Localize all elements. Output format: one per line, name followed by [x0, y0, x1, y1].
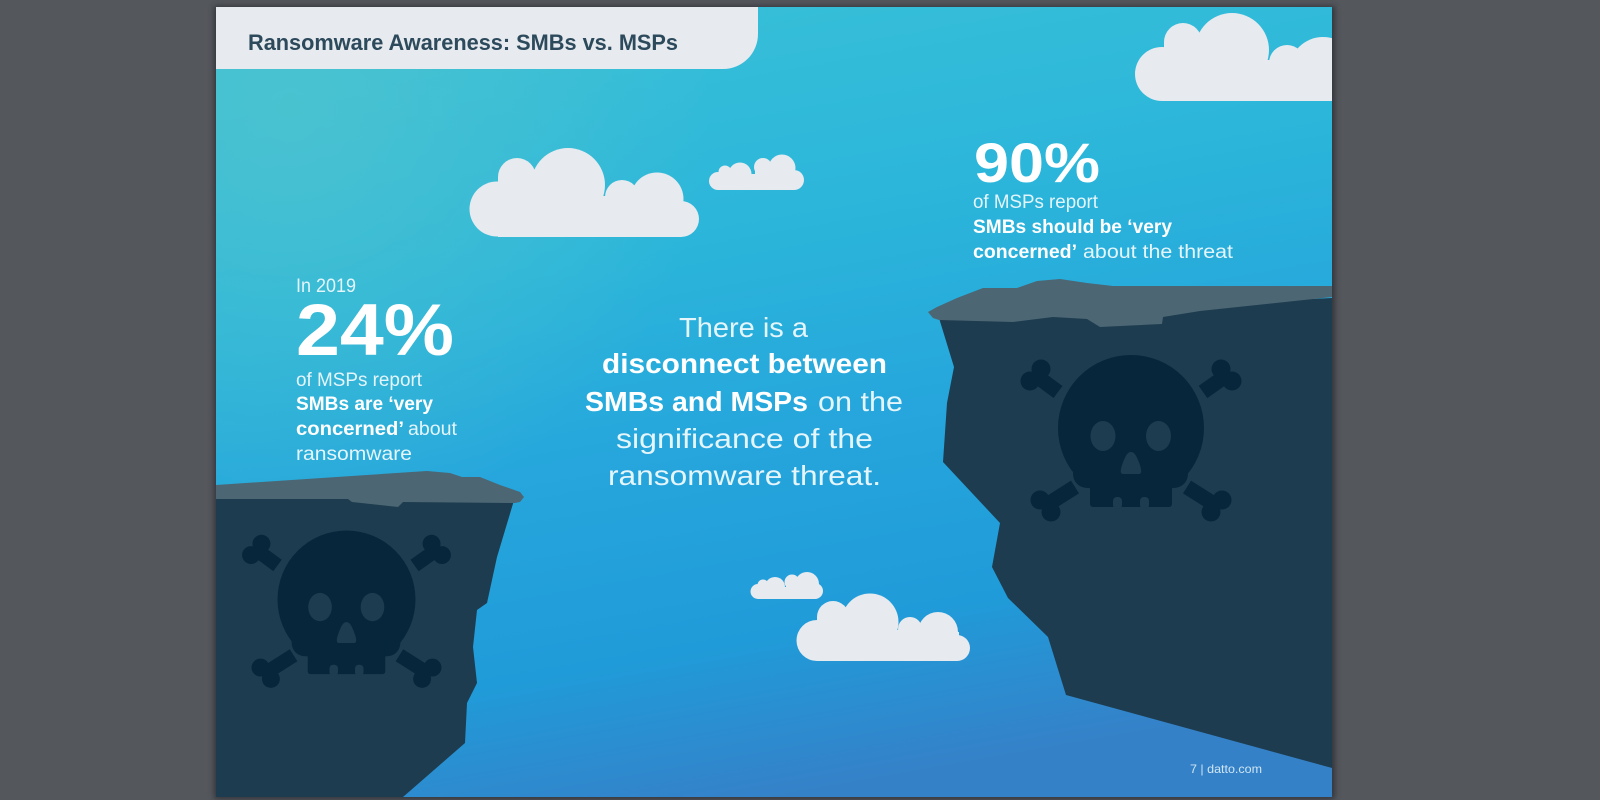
stat number: 24%: 24% — [296, 290, 454, 371]
cloud: top right — [1135, 13, 1332, 101]
cloud: upper centre small — [709, 154, 804, 190]
cloud: lower large — [796, 594, 970, 661]
central statement: There is a — [679, 312, 808, 343]
title tab — [216, 7, 758, 69]
stat block: 90%: about the threat — [1083, 242, 1234, 263]
footer page number: 7 | datto.com — [1190, 762, 1262, 776]
stat block: 24%: of MSPs report — [296, 370, 423, 391]
central statement: disconnect between — [602, 348, 887, 379]
right cliff body — [939, 298, 1332, 768]
stat number: 90%: 90% — [974, 131, 1100, 194]
stat block: 90% — [973, 131, 1234, 263]
sky teal glow — [216, 7, 1332, 797]
central statement: significance of the — [616, 423, 873, 454]
stat block: 24%: about — [408, 419, 458, 440]
stat block: 24% — [296, 276, 458, 465]
stat block: 24%: SMBs are ‘very — [296, 394, 433, 415]
cloud: upper centre large — [470, 148, 699, 237]
stat block: 24%: In 2019 — [296, 276, 356, 297]
right cliff top ledge — [928, 279, 1332, 327]
title: Ransomware Awareness: SMBs vs. MSPs — [248, 30, 678, 55]
stat block: 90%: SMBs should be ‘very — [973, 217, 1172, 238]
central statement: ransomware threat. — [608, 460, 881, 491]
left cliff top ledge — [216, 471, 524, 507]
stat block: 90%: of MSPs report — [973, 192, 1099, 213]
left cliff — [216, 471, 524, 797]
stat block: 24%: ransomware — [296, 444, 412, 465]
icon: right skull and crossbones — [1020, 355, 1242, 522]
cloud: lower small — [750, 572, 823, 599]
central statement: SMBs and MSPs — [585, 386, 808, 417]
panel: infographic slide — [212, 4, 1337, 800]
central statement: on the — [818, 386, 903, 417]
left cliff body — [216, 497, 515, 797]
stat block: 90%: concerned’ — [973, 242, 1077, 263]
panel shadow — [214, 6, 1335, 799]
sky background — [216, 7, 1332, 797]
central statement — [585, 312, 903, 491]
stat block: 24%: concerned’ — [296, 419, 404, 440]
icon: left skull and crossbones — [242, 531, 451, 688]
right cliff — [928, 279, 1332, 768]
